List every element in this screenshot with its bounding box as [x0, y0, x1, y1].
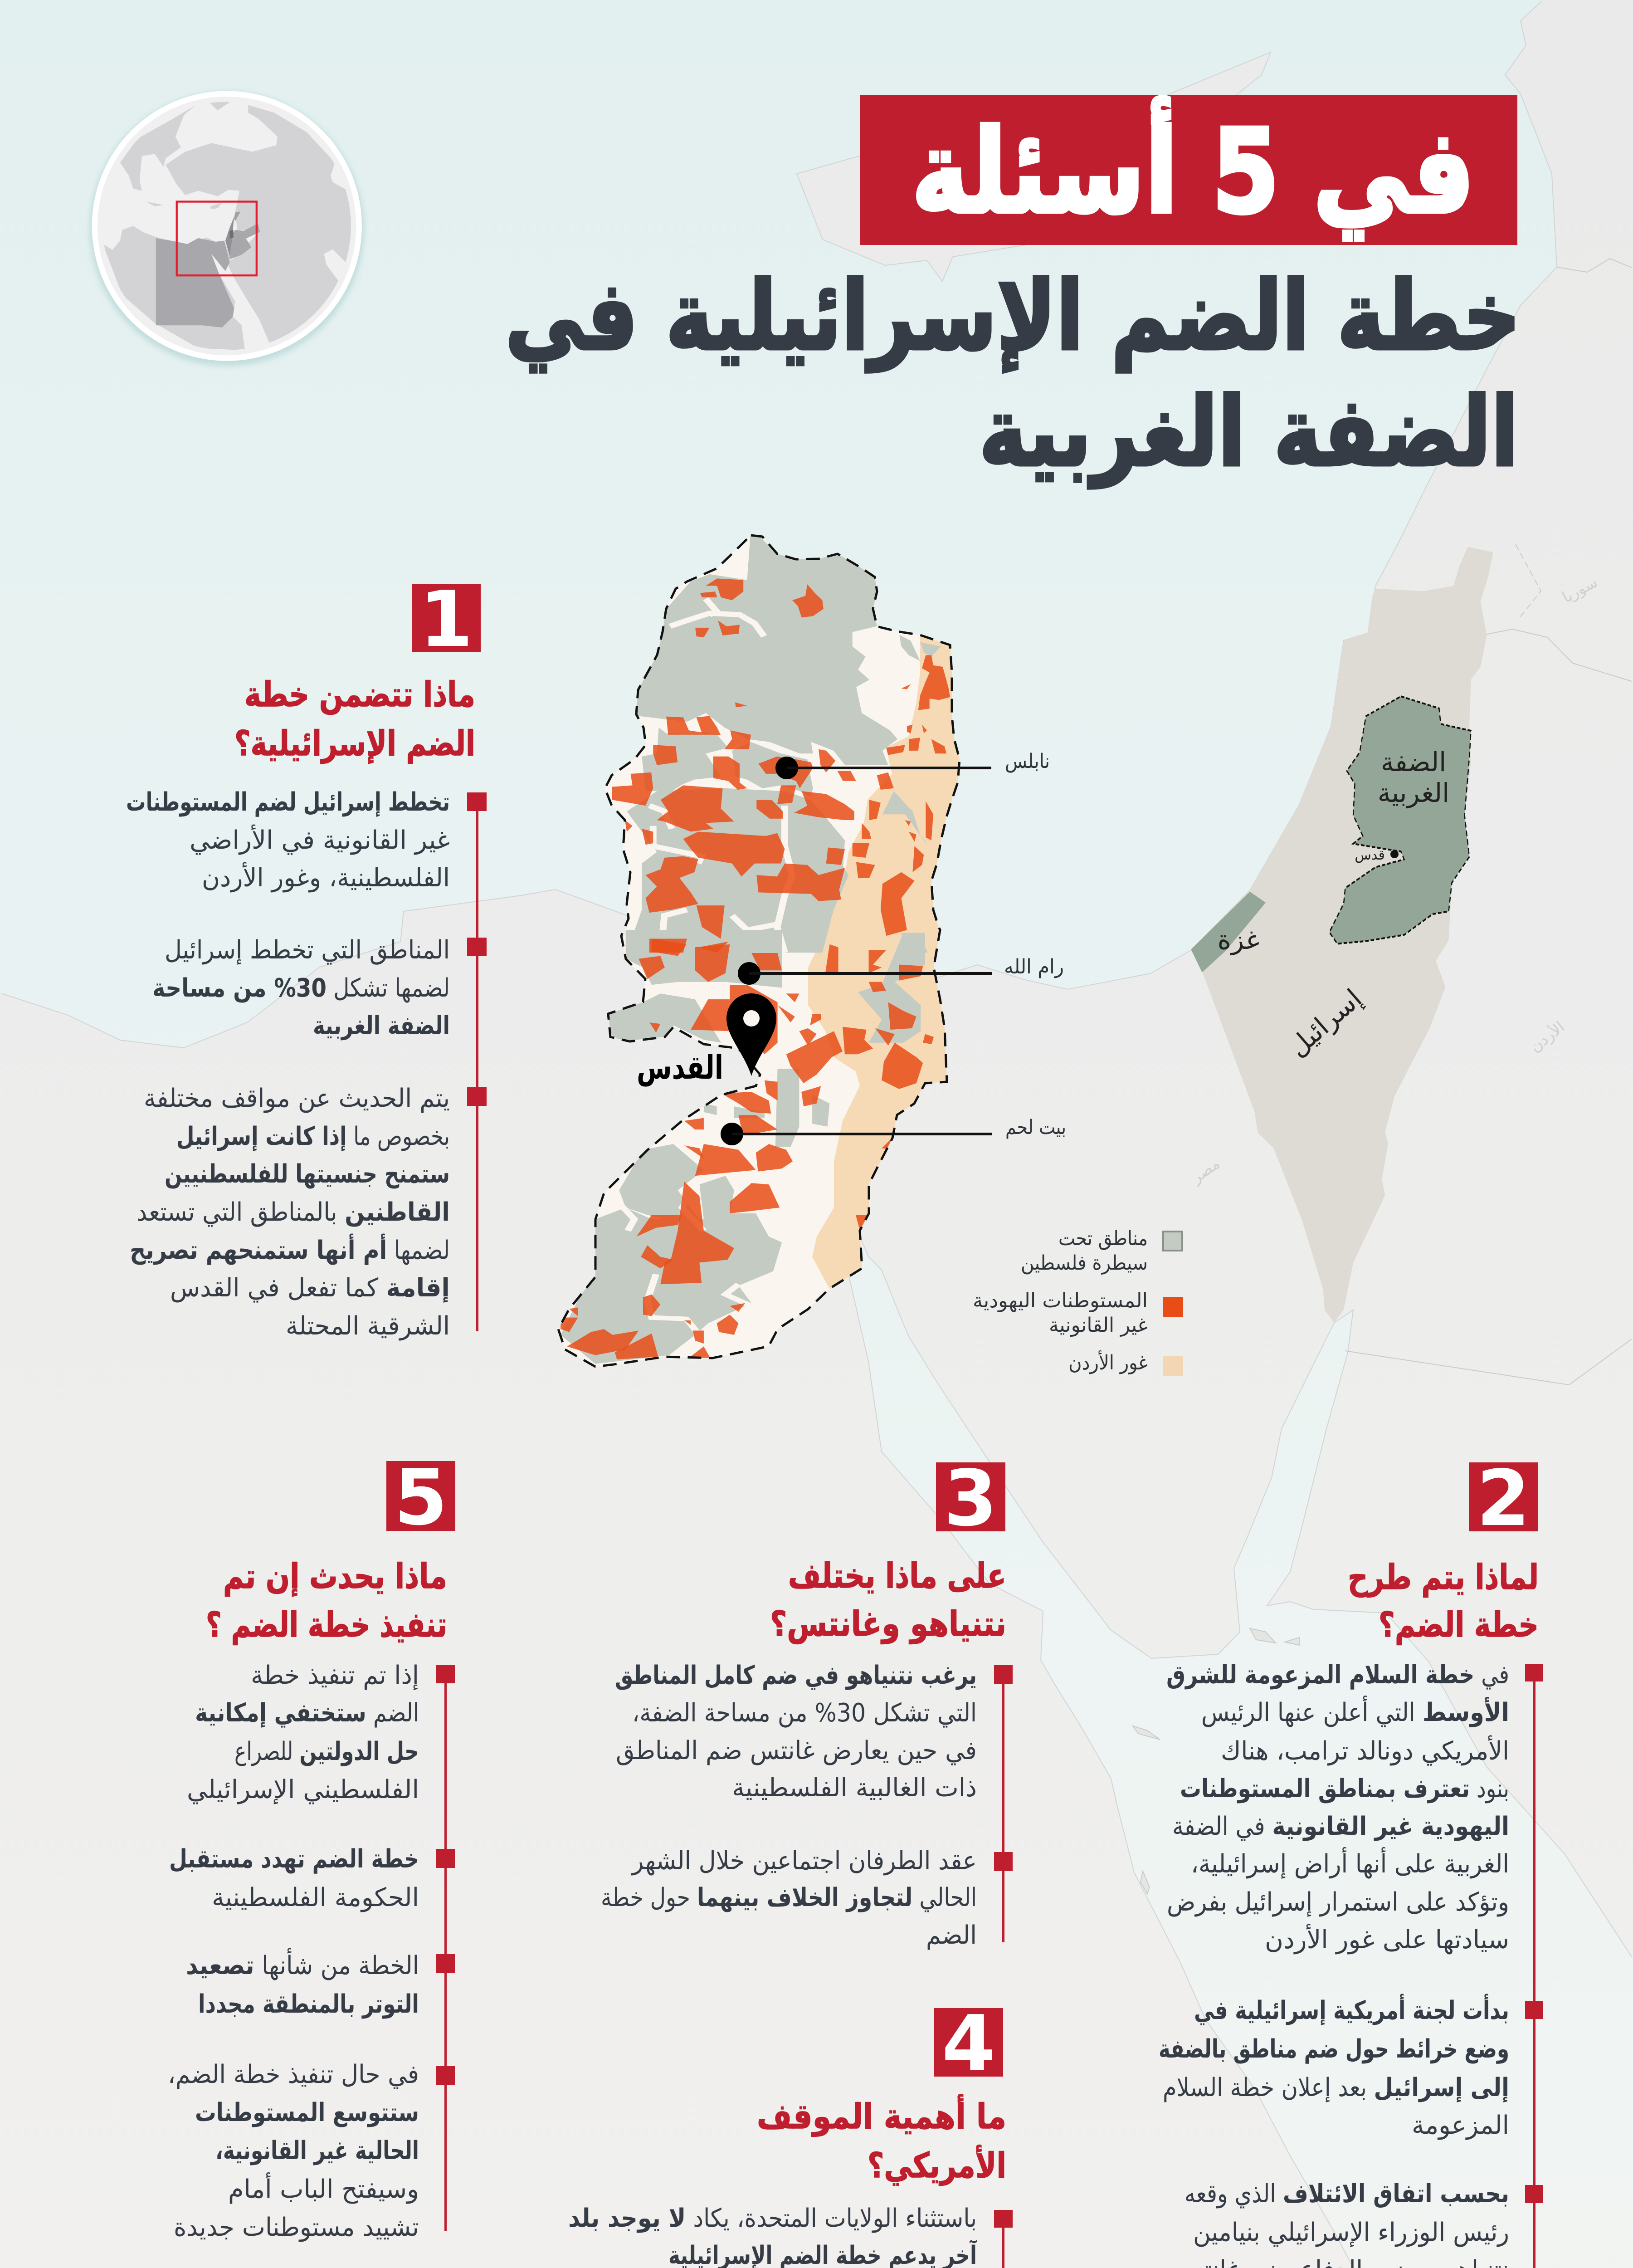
heading 2: لماذا يتم طرح: [1348, 1557, 1539, 1598]
West Bank detail map: [544, 522, 1066, 1383]
body text 5: وسيفتح الباب أمام: [228, 2172, 419, 2204]
background map: islands and borders: [1133, 259, 1632, 1894]
overview map: Israel, Gaza, West Bank: غزة: [1218, 924, 1259, 956]
number badge 5: 5: [394, 1453, 448, 1543]
body text 1: القاطنين بالمناطق التي تستعد: [136, 1198, 450, 1227]
body text 5: الحكومة الفلسطينية: [212, 1883, 419, 1912]
panel 1: what the plan includes: [126, 575, 487, 1341]
body text 1: يتم الحديث عن مواقف مختلفة: [144, 1084, 450, 1113]
main title: [505, 260, 1521, 489]
body text 4: [566, 2204, 977, 2268]
map legend: [973, 1227, 1183, 1376]
heading 4: الأمريكي؟: [868, 2145, 1006, 2186]
background map: Cyprus: [797, 52, 1271, 281]
heading 2: خطة الضم؟: [1379, 1604, 1539, 1645]
heading 5: [206, 1556, 447, 1645]
body text 1: غير القانونية في الأراضي: [190, 824, 450, 855]
body text 5: ستتوسع المستوطنات: [195, 2098, 419, 2127]
body text 3: يرغب نتنياهو في ضم كامل المناطق: [615, 1661, 977, 1690]
body text 2: وتؤكد على استمرار إسرائيل بفرض: [1167, 1887, 1509, 1917]
body text 2: [1159, 1660, 1509, 2268]
main title: الضفة الغربية: [979, 376, 1519, 489]
panel 4: importance of the US position: [566, 1999, 1013, 2268]
body text 2: المزعومة: [1412, 2111, 1509, 2140]
number badge 2: 2: [1477, 1454, 1530, 1544]
body text 5: الفلسطيني الإسرائيلي: [187, 1775, 419, 1804]
faint country label: Jordan: الأردن: [1526, 1017, 1568, 1056]
body text 4: باستثناء الولايات المتحدة، يكاد لا يوجد بلد: [568, 2204, 977, 2233]
body text 2: الأمريكي دونالد ترامب، هناك: [1221, 1735, 1509, 1766]
body text 1: الفلسطينية، وغور الأردن: [202, 862, 450, 893]
overview map: Israel, Gaza, West Bank: الضفة: [1381, 747, 1446, 777]
locator map: [90, 91, 364, 366]
body text 2: الغربية على أنها أراض إسرائيلية،: [1191, 1847, 1509, 1879]
city marker: Bethlehem: بيت لحم: [1005, 1116, 1066, 1139]
body text 1: بخصوص ما إذا كانت إسرائيل: [176, 1122, 450, 1151]
body text 1: تخطط إسرائيل لضم المستوطنات: [126, 787, 450, 817]
timeline 1: [467, 792, 487, 1331]
heading 5: تنفيذ خطة الضم ؟: [206, 1604, 447, 1645]
body text 1: الضفة الغربية: [313, 1011, 450, 1041]
body text 2: في خطة السلام المزعومة للشرق: [1166, 1660, 1509, 1690]
number badge 3: 3: [944, 1454, 997, 1544]
overview map: Israel, Gaza, West Bank: إسرائيل: [1282, 983, 1368, 1063]
body text 2: الأوسط التي أعلن عنها الرئيس: [1201, 1696, 1509, 1727]
faint country label: Egypt: مصر: [1187, 1155, 1223, 1188]
body text 1: [126, 787, 450, 1341]
overview map: Israel, Gaza, West Bank: الغربية: [1378, 777, 1449, 809]
city marker: Nablus: نابلس: [1005, 750, 1050, 773]
body text 5: التوتر بالمنطقة مجددا: [198, 1989, 419, 2019]
heading 2: [1348, 1557, 1539, 1645]
timeline 2: [1525, 1664, 1543, 2268]
body text 5: خطة الضم تهدد مستقبل: [169, 1844, 419, 1874]
body text 5: الضم ستختفي إمكانية: [195, 1698, 419, 1728]
city marker: Bethlehem: [721, 1116, 1066, 1145]
heading 3: على ماذا يختلف: [788, 1555, 1006, 1596]
body text 3: عقد الطرفان اجتماعين خلال الشهر: [631, 1846, 977, 1876]
body text 5: في حال تنفيذ خطة الضم،: [168, 2060, 419, 2089]
body text 5: الخطة من شأنها تصعيد: [186, 1948, 419, 1980]
heading 1: الضم الإسرائيلية؟: [234, 723, 475, 764]
body text 3: الحالي لتجاوز الخلاف بينهما حول خطة: [601, 1883, 977, 1912]
panel 3: Netanyahu and Gantz differences: [601, 1454, 1013, 1950]
map legend: مناطق تحت: [1058, 1227, 1148, 1250]
body text 2: إلى إسرائيل بعد إعلان خطة السلام: [1163, 2073, 1509, 2103]
heading 3: [770, 1555, 1006, 1644]
body text 2: بحسب اتفاق الائتلاف الذي وقعه: [1185, 2179, 1509, 2209]
body text 5: الحالية غير القانونية،: [215, 2136, 419, 2165]
map legend: غير القانونية: [1049, 1314, 1148, 1337]
number badge 1: 1: [419, 575, 473, 665]
body text 5: إذا تم تنفيذ خطة: [251, 1661, 419, 1691]
body text 3: في حين يعارض غانتس ضم المناطق: [616, 1736, 977, 1765]
body text 2: وضع خرائط حول ضم مناطق بالضفة: [1159, 2034, 1509, 2064]
heading 1: ماذا تتضمن خطة: [244, 674, 475, 715]
body text 5: تشييد مستوطنات جديدة: [174, 2213, 419, 2242]
pin: Jerusalem: [637, 993, 776, 1086]
body text 1: لضمها تشكل 30% من مساحة: [152, 973, 450, 1003]
map legend: غور الأردن: [1068, 1350, 1148, 1374]
pin: Jerusalem: القدس: [637, 1048, 723, 1086]
body text 5: [168, 1661, 419, 2242]
body text 1: إقامة كما تفعل في القدس: [170, 1273, 450, 1303]
overview map: Israel, Gaza, West Bank: قدس: [1355, 847, 1385, 863]
city marker: Ramallah: رام الله: [1004, 955, 1064, 978]
body text 5: حل الدولتين للصراع: [234, 1737, 419, 1766]
body text 3: [601, 1661, 977, 1950]
body text 1: المناطق التي تخطط إسرائيل: [165, 935, 450, 965]
timeline 3: [994, 1665, 1013, 1942]
body text 1: لضمها أم أنها ستمنحهم تصريح: [130, 1233, 450, 1265]
body text 2: رئيس الوزراء الإسرائيلي بنيامين: [1193, 2218, 1509, 2247]
panel 5: what happens if implemented: [168, 1453, 455, 2242]
overview map: Israel, Gaza, West Bank: [1191, 547, 1493, 1323]
timeline 5: [436, 1665, 455, 2231]
heading 1: [234, 674, 475, 764]
heading 5: ماذا يحدث إن تم: [223, 1556, 447, 1597]
body text 2: بدأت لجنة أمريكية إسرائيلية في: [1194, 1994, 1509, 2025]
map legend: سيطرة فلسطين: [1021, 1251, 1148, 1275]
body text 2: اليهودية غير القانونية في الضفة: [1172, 1812, 1509, 1841]
map legend: المستوطنات اليهودية: [973, 1289, 1148, 1312]
city marker: Ramallah: [738, 955, 1064, 985]
body text 3: ذات الغالبية الفلسطينية: [732, 1773, 977, 1803]
timeline 4: [994, 2210, 1013, 2268]
city marker: Nablus: [775, 750, 1050, 779]
heading 4: [757, 2094, 1006, 2186]
body text 3: الضم: [926, 1921, 977, 1950]
faint country label: Syria: سوريا: [1559, 573, 1601, 606]
heading 4: ما أهمية الموقف: [757, 2094, 1006, 2137]
heading 3: نتنياهو وغانتس؟: [770, 1603, 1006, 1644]
panel 2: why the plan is proposed: [1159, 1454, 1543, 2268]
number badge 4: 4: [942, 1999, 995, 2089]
body text 1: الشرقية المحتلة: [286, 1311, 450, 1341]
body text 2: بنود تعترف بمناطق المستوطنات: [1180, 1774, 1509, 1804]
title banner: في 5 أسئلة: [912, 97, 1475, 240]
body text 3: التي تشكل 30% من مساحة الضفة،: [632, 1698, 977, 1728]
body text 2: سيادتها على غور الأردن: [1265, 1924, 1509, 1955]
body text 1: ستمنح جنسيتها للفلسطنيين: [165, 1159, 450, 1189]
